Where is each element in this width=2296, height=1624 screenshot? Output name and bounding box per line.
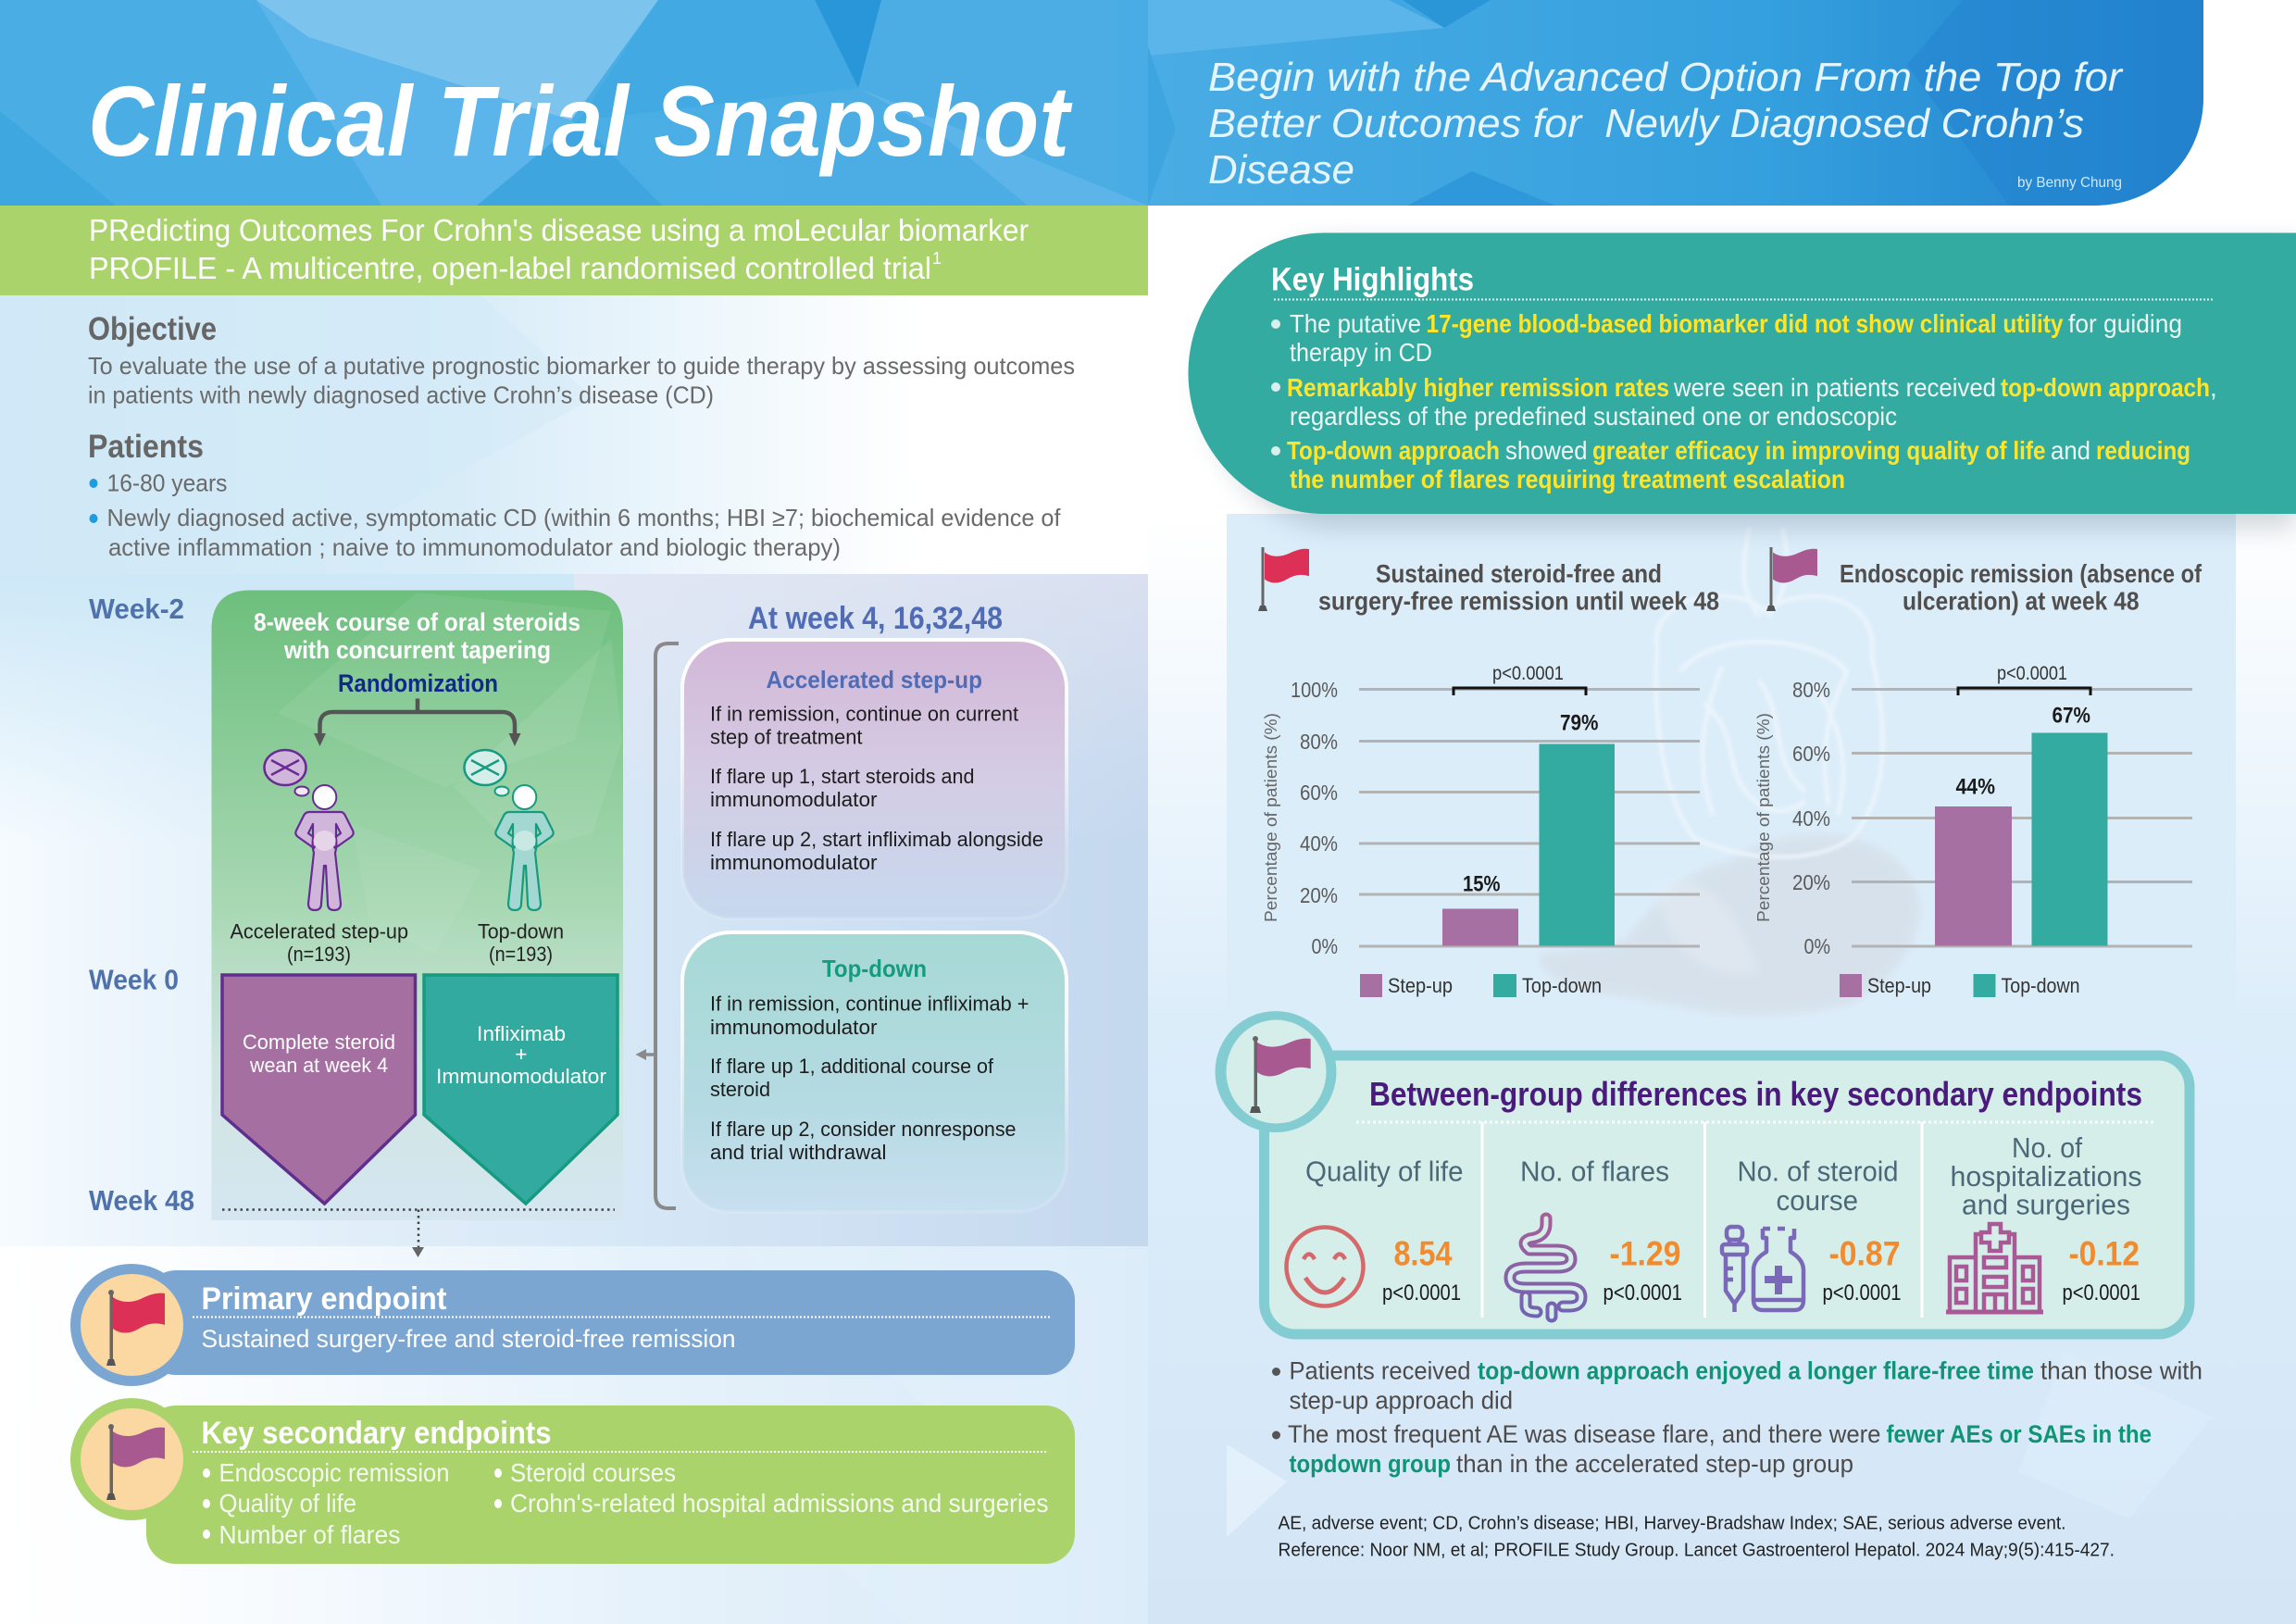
highlight 3: Top-down approach <box>1287 436 1500 465</box>
chart 2 heading: ulceration) at week 48 <box>1903 587 2139 615</box>
patients: 16-80 years <box>107 468 228 496</box>
metric: steroid course: course <box>1776 1184 1858 1217</box>
background image: intestine and hand <box>1537 528 1921 1016</box>
metric: quality of life: p<0.0001 <box>1382 1280 1461 1305</box>
safety and flare findings: top-down approach enjoyed a longer flare-free time <box>1478 1357 2034 1385</box>
bar: top-down 67% <box>2031 704 2107 946</box>
secondary endpoint list: Steroid courses <box>510 1458 676 1487</box>
patients: active inflammation ; naive to immunomodulator and biologic therapy) <box>108 533 841 561</box>
secondary endpoint list: Number of flares <box>218 1520 400 1549</box>
highlight 2: regardless of the predefined sustained one or endoscopic <box>1290 402 1897 431</box>
panel: randomisation flow <box>211 591 623 1220</box>
study title band <box>0 206 1148 295</box>
steroid course heading <box>254 608 580 664</box>
panel: top-down: Top-down <box>822 955 927 982</box>
study title band: 1 <box>932 249 942 268</box>
panel: accelerated step-up <box>682 640 1067 918</box>
metric: flares <box>1510 1156 1682 1317</box>
legend <box>1360 974 1602 997</box>
y axis labels <box>1291 678 1338 958</box>
bar: step-up 15%: 15% <box>1463 872 1500 896</box>
panel: primary endpoint: Sustained surgery-free and steroid-free remission <box>202 1325 735 1353</box>
significance bracket: p<0.0001 <box>1997 663 2067 684</box>
bar: top-down 67%: 67% <box>2052 704 2090 728</box>
subtitle: Begin with the Advanced Option From the Top for <box>1208 55 2124 100</box>
panel: accelerated step-up: step of treatment <box>710 726 863 748</box>
panel: primary endpoint: Primary endpoint <box>202 1281 446 1317</box>
metric: quality of life <box>1287 1156 1463 1305</box>
icon: smile <box>1287 1228 1363 1305</box>
metric: hospitalizations and surgeries: hospitalizations <box>1950 1160 2142 1193</box>
patients <box>88 429 1061 561</box>
safety and flare findings: than in the accelerated step-up group <box>1456 1450 1853 1478</box>
panel: accelerated step-up: If flare up 1, start steroids and <box>710 765 974 788</box>
icon: red flag <box>1258 547 1309 611</box>
y axis labels: 60% <box>1300 781 1338 805</box>
header banner <box>0 0 2203 206</box>
highlight 2: Remarkably higher remission rates <box>1287 373 1669 402</box>
metric: hospitalizations and surgeries: and surgeries <box>1962 1189 2130 1220</box>
bar chart: endoscopic remission: Percentage of patients (%) <box>1753 713 1773 922</box>
safety and flare findings <box>1272 1357 2202 1478</box>
chart 1 heading <box>1258 547 1719 615</box>
legend: Top-down <box>1522 974 1602 997</box>
panel: top-down: If in remission, continue infliximab + <box>710 993 1029 1015</box>
safety and flare findings: Patients received <box>1289 1357 1470 1385</box>
pentagon: infliximab plus immunomodulator <box>424 975 618 1204</box>
steroid course heading: 8-week course of oral steroids <box>254 608 580 636</box>
secondary endpoint list: Endoscopic remission <box>218 1458 450 1487</box>
highlight 1: for guiding <box>2068 309 2182 338</box>
person: top-down <box>465 750 554 910</box>
panel: top-down: and trial withdrawal <box>710 1141 887 1164</box>
subtitle: Better Outcomes for Newly Diagnosed Crohn’s <box>1208 101 2084 146</box>
bar: step-up 44%: 44% <box>1955 774 1995 800</box>
patients: Patients <box>88 429 204 465</box>
y axis labels: 80% <box>1792 678 1830 702</box>
person: accelerated step-up <box>265 750 354 910</box>
arm labels: Top-down <box>478 920 564 943</box>
y axis labels: 40% <box>1792 806 1830 831</box>
panel: key secondary endpoints <box>70 1398 1075 1564</box>
dotted line to primary endpoint <box>222 1209 615 1257</box>
panel: accelerated step-up: immunomodulator <box>710 851 878 874</box>
week labels: Week-2 <box>89 593 184 625</box>
y axis labels: 0% <box>1803 934 1830 958</box>
significance bracket <box>1454 663 1586 695</box>
highlight 3: reducing <box>2096 436 2190 465</box>
icon: hospital <box>1946 1224 2043 1312</box>
objective: Objective <box>88 311 217 347</box>
panel: top-down: immunomodulator <box>710 1016 878 1039</box>
icon: red flag <box>106 1290 165 1366</box>
metric: steroid course: No. of steroid <box>1737 1156 1898 1187</box>
arm labels: Accelerated step-up <box>230 920 408 943</box>
chart 2 heading: Endoscopic remission (absence of <box>1840 559 2202 588</box>
objective: To evaluate the use of a putative prognostic biomarker to guide therapy by assessing outcomes <box>88 352 1075 380</box>
y axis labels: 20% <box>1300 883 1338 907</box>
bar: top-down 79% <box>1539 711 1615 946</box>
safety and flare findings: The most frequent AE was disease flare, and there were <box>1288 1420 1881 1448</box>
footnotes and reference <box>1278 1513 2115 1561</box>
metric: hospitalizations and surgeries: No. of <box>2012 1131 2082 1164</box>
highlight 2: top-down approach <box>2001 373 2210 402</box>
significance bracket: p<0.0001 <box>1492 663 1564 684</box>
legend: Top-down <box>2002 974 2079 997</box>
metric: hospitalizations and surgeries <box>1946 1131 2142 1312</box>
bracket with arrow <box>635 643 679 1208</box>
heading: Between-group differences in key secondary endpoints <box>1369 1075 2142 1113</box>
icon: intestine <box>1510 1218 1581 1317</box>
metric: flares: No. of flares <box>1520 1156 1669 1187</box>
study title band: PROFILE - A multicentre, open-label randomised controlled trial <box>89 251 931 285</box>
panel: top-down <box>682 932 1067 1212</box>
at week heading: At week 4, 16,32,48 <box>748 601 1003 636</box>
arm labels: (n=193) <box>287 943 351 966</box>
metric: hospitalizations and surgeries: p<0.0001 <box>2063 1280 2140 1305</box>
icon: syringe and bottle <box>1722 1227 1803 1312</box>
randomization arrows <box>314 698 520 746</box>
metric: steroid course: p<0.0001 <box>1822 1280 1902 1305</box>
highlight 3: the number of flares requiring treatment escalation <box>1290 465 1845 493</box>
metric: steroid course: -0.87 <box>1829 1235 1900 1272</box>
footnotes and reference: Reference: Noor NM, et al; PROFILE Study Group. Lancet Gastroenterol Hepatol. 2024 May;9(5):415-427. <box>1278 1541 2115 1561</box>
secondary endpoint list: Crohn's-related hospital admissions and surgeries <box>510 1489 1048 1518</box>
chart 2 heading <box>1766 547 2202 615</box>
highlight 3: greater efficacy in improving quality of life <box>1592 436 2046 465</box>
panel: top-down: If flare up 1, additional course of <box>710 1055 994 1078</box>
week labels: Week 48 <box>89 1184 194 1217</box>
patients: Newly diagnosed active, symptomatic CD (within 6 months; HBI ≥7; biochemical evidence of <box>107 504 1061 531</box>
icon: purple flag <box>1250 1036 1311 1113</box>
objective: in patients with newly diagnosed active Crohn’s disease (CD) <box>88 381 714 409</box>
pentagon: complete steroid wean: wean at week 4 <box>249 1054 388 1077</box>
steroid course heading: with concurrent tapering <box>283 636 551 664</box>
legend <box>1840 974 2079 997</box>
arm labels <box>230 920 564 966</box>
metric: quality of life: 8.54 <box>1394 1235 1453 1272</box>
highlight 2: , <box>2210 373 2217 402</box>
metric: flares: -1.29 <box>1609 1235 1681 1272</box>
byline: by Benny Chung <box>2017 175 2122 191</box>
bar: top-down 79%: 79% <box>1560 711 1598 735</box>
icon: purple flag <box>1766 547 1817 611</box>
y axis labels: 80% <box>1300 730 1338 754</box>
y axis labels: 100% <box>1291 678 1338 702</box>
safety and flare findings: topdown group <box>1289 1450 1451 1478</box>
subtitle <box>1208 55 2124 193</box>
footnotes and reference: AE, adverse event; CD, Crohn’s disease; HBI, Harvey-Bradshaw Index; SAE, serious adverse event. <box>1278 1513 2066 1533</box>
icon: purple flag <box>106 1424 165 1500</box>
highlight 3 <box>1271 436 2190 493</box>
bar: step-up 44% <box>1935 774 2012 946</box>
legend: Step-up <box>1867 974 1931 997</box>
title: Clinical Trial Snapshot <box>88 65 1073 177</box>
y axis labels: 20% <box>1792 870 1830 894</box>
subtitle: Disease <box>1208 147 1354 193</box>
highlight 1: The putative <box>1290 309 1421 338</box>
highlight 1 <box>1271 309 2182 367</box>
panel: accelerated step-up: Accelerated step-up <box>767 666 982 693</box>
panel: accelerated step-up: If flare up 2, start infliximab alongside <box>710 828 1043 851</box>
randomization label: Randomization <box>338 669 498 697</box>
highlight 1: therapy in CD <box>1290 338 1432 367</box>
bar chart: endoscopic remission <box>1753 663 2192 997</box>
highlight 1: 17-gene blood-based biomarker did not show clinical utility <box>1426 309 2064 338</box>
secondary endpoint list: Quality of life <box>218 1489 356 1518</box>
safety and flare findings: fewer AEs or SAEs in the <box>1887 1420 2152 1448</box>
y axis labels: 0% <box>1311 934 1338 958</box>
bar chart: sustained remission: Percentage of patients (%) <box>1261 713 1280 922</box>
panel: top-down: If flare up 2, consider nonresponse <box>710 1118 1017 1141</box>
metric: steroid course <box>1722 1156 1902 1312</box>
pentagon: infliximab plus immunomodulator: + <box>515 1043 528 1066</box>
highlight 2: were seen in patients received <box>1673 373 1996 402</box>
week labels <box>89 593 194 1217</box>
pentagon: infliximab plus immunomodulator: Infliximab <box>477 1022 566 1045</box>
chart 1 heading: Sustained steroid-free and <box>1376 559 1662 588</box>
highlight 3: and <box>2051 436 2090 465</box>
panel: key secondary endpoints: Key secondary endpoints <box>202 1416 552 1451</box>
arm labels: (n=193) <box>489 943 553 966</box>
bar chart: sustained remission <box>1261 663 1700 997</box>
panel: accelerated step-up: immunomodulator <box>710 788 878 811</box>
pentagon: complete steroid wean: Complete steroid <box>243 1031 395 1054</box>
y axis labels <box>1792 678 1830 958</box>
metric: quality of life: Quality of life <box>1305 1156 1463 1187</box>
y axis labels: 60% <box>1792 742 1830 766</box>
week labels: Week 0 <box>89 963 179 996</box>
chart 1 heading: surgery-free remission until week 48 <box>1318 587 1719 615</box>
study title band: PRedicting Outcomes For Crohn's disease using a moLecular biomarker <box>89 213 1029 247</box>
pentagon: complete steroid wean <box>222 975 415 1204</box>
safety and flare findings: step-up approach did <box>1289 1387 1513 1415</box>
safety and flare findings: than those with <box>2040 1357 2202 1385</box>
highlight 3: showed <box>1505 436 1587 465</box>
panel: between-group differences <box>1215 1011 2190 1334</box>
highlight 2 <box>1271 373 2217 431</box>
metric: hospitalizations and surgeries: -0.12 <box>2068 1235 2140 1272</box>
panel: key highlights: Key Highlights <box>1271 261 1474 298</box>
pentagon: infliximab plus immunomodulator: Immunomodulator <box>436 1065 607 1088</box>
panel: top-down: steroid <box>710 1078 770 1101</box>
objective <box>88 311 1075 409</box>
panel: accelerated step-up: If in remission, continue on current <box>710 702 1019 726</box>
panel: key highlights <box>1189 233 2296 528</box>
secondary endpoint list <box>203 1458 1048 1549</box>
legend: Step-up <box>1388 974 1453 997</box>
significance bracket <box>1958 663 2090 695</box>
panel: primary endpoint <box>70 1264 1075 1386</box>
bar: step-up 15% <box>1442 872 1518 946</box>
metric: flares: p<0.0001 <box>1603 1280 1682 1305</box>
y axis labels: 40% <box>1300 831 1338 856</box>
